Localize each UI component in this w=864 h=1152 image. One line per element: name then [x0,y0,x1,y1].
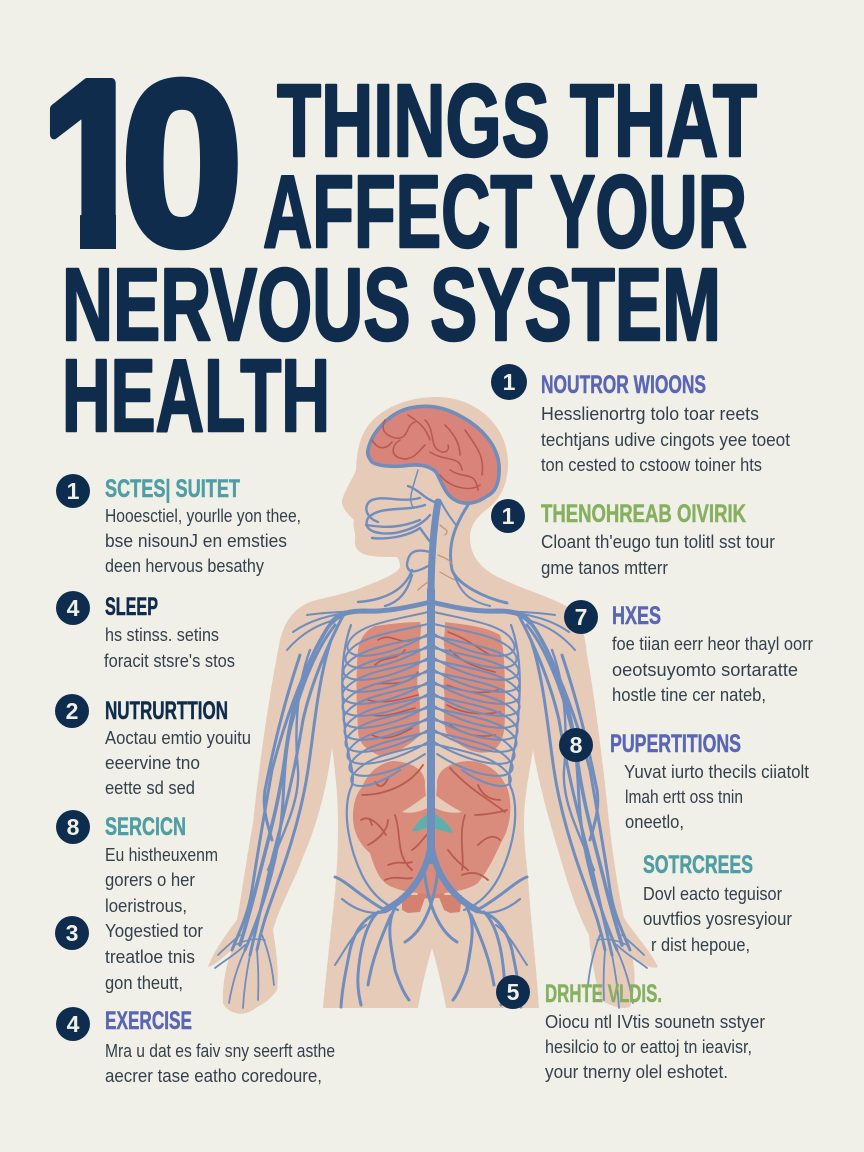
number badge: 5 [507,979,520,1005]
item: nutrition [55,694,251,798]
body text: aecrer tase eatho coredoure, [105,1066,322,1086]
body text: your tnerny olel eshotet. [545,1062,728,1082]
body text: eette sd sed [105,778,195,798]
body text: bse nisounJ en emsties [105,531,287,551]
body text [541,532,775,578]
number badge [496,975,530,1009]
item: scientific suitet [56,474,301,576]
body text [104,625,235,671]
body text: Hesslienortrg tolo toar reets [541,404,759,424]
flank and leg nerves [335,625,438,1007]
left lung [356,622,421,756]
number badge: 1 [67,478,80,504]
teal centre organ [412,812,453,833]
number badge: 4 [67,595,80,621]
body text [612,634,813,705]
body text: oneetlo, [625,812,684,832]
number badge: 4 [67,1011,80,1037]
body text: Cloant th'eugo tun tolitl sst tour [541,532,775,552]
heading: SOTRCREES [643,851,753,879]
body text: Dovl eacto teguisor [643,884,782,904]
left abdominal organ [353,761,431,895]
body text [105,845,218,916]
body text [541,404,790,475]
body text [105,921,203,993]
body text: lmah ertt oss tnin [625,787,743,807]
brain [368,406,499,503]
brain folds [372,415,483,490]
item: sotrcrees [643,851,792,955]
body text: eeervine tno [105,753,200,773]
body text: ouvtfios yosresyiour [643,909,792,929]
heading: HXES [612,602,661,630]
body text: Yogestied tor [105,921,203,941]
number badge [56,810,90,844]
item: thenohreab oivirik [491,499,775,578]
heading: SERCICN [105,813,186,841]
figure: human body with nervous system [208,397,658,1014]
body text: ton cested to cstoow toiner hts [541,455,762,475]
number badge [491,364,527,400]
body text: r dist hepoue, [651,935,750,955]
body text: Eu histheuxenm [105,845,218,865]
item: exercise [56,1007,335,1086]
abdominal organs [353,761,510,913]
body text [105,728,251,798]
body text: gme tanos mtterr [541,558,668,578]
mirrored right-side nerves [424,602,647,1008]
title digit 1: 1 [41,32,147,294]
number badge [56,474,90,508]
heading: PUPERTITIONS [610,730,741,758]
lower small organ [402,868,462,913]
number badge [559,728,593,762]
abdominal folds [361,765,507,880]
number badge [55,916,89,950]
brain shape [368,406,499,503]
item: drhte vldis [496,975,765,1082]
body text: Yuvat iurto thecils ciiatolt [624,762,809,782]
heading: DRHTE VLDIS. [545,980,662,1008]
body text: hs stinss. setins [105,625,219,645]
body text: oeotsuyomto sortaratte [612,660,798,680]
body text: hostle tine cer nateb, [612,685,766,705]
item: sleep [56,591,235,671]
left-side nerves [215,602,438,1008]
number badge [56,1007,90,1041]
body text: foracit stsre's stos [104,651,235,671]
number badge: 8 [67,814,80,840]
spinal cord [427,590,435,860]
body text: hesilcio to or eattoj tn ieavisr, [545,1037,752,1057]
body text: gon theutt, [105,973,183,993]
heading: NOUTROR WIOONS [541,371,706,399]
neck detail marks [418,525,455,590]
number badge [491,499,525,533]
body silhouette [208,397,658,1014]
body text [545,1012,765,1082]
right lung [444,622,505,753]
title line: health: HEALTH [62,338,330,453]
body text: Hooesctiel, yourlle yon thee, [105,506,301,526]
lungs [356,622,505,756]
number badge [56,591,90,625]
lung folds [368,632,500,738]
face and neck nerves [358,470,507,606]
item: third badge group [55,916,203,993]
heading: THENOHREAB OIVIRIK [541,500,746,528]
item: sercicn [56,810,218,916]
body text: treatloe tnis [105,947,195,967]
number badge: 3 [66,920,78,946]
body text [624,762,809,832]
heading: SCTES| SUITET [105,475,240,503]
right abdominal organ [431,761,510,895]
body text: Aoctau emtio youitu [105,728,251,748]
title digit 0: 0 [121,32,243,294]
arm nerves [215,602,431,1008]
number badge [55,694,89,728]
heading: EXERCISE [105,1007,192,1035]
number badge: 7 [575,604,587,630]
title [30,32,757,453]
number badge: 8 [570,732,583,758]
band behind teal organ [402,792,462,813]
body text: techtjans udive cingots yee toeot [541,430,790,450]
neck nerve trunk [431,502,438,600]
item: noutror wioons [491,364,790,475]
rib nerves [342,612,428,786]
heading: SLEEP [105,593,158,621]
number badge: 1 [503,369,516,395]
body text: loeristrous, [105,896,187,916]
number badge [564,600,598,634]
body text: Oiocu ntl IVtis sounetn sstyer [545,1012,765,1032]
body text: Mra u dat es faiv sny seerft asthe [105,1041,335,1061]
body text: foe tiian eerr heor thayl oorr [612,634,813,654]
body text [105,1041,335,1086]
body text [105,506,301,576]
number badge: 2 [66,698,78,724]
body text [643,884,792,955]
heading: NUTRURTTION [105,697,228,725]
body text: gorers o her [105,870,195,890]
foot removal for digit 1 [30,150,155,262]
item: pupertitions [559,728,809,832]
body text: deen hervous besathy [105,556,264,576]
number badge: 1 [502,503,515,529]
item: hxes [564,600,813,705]
